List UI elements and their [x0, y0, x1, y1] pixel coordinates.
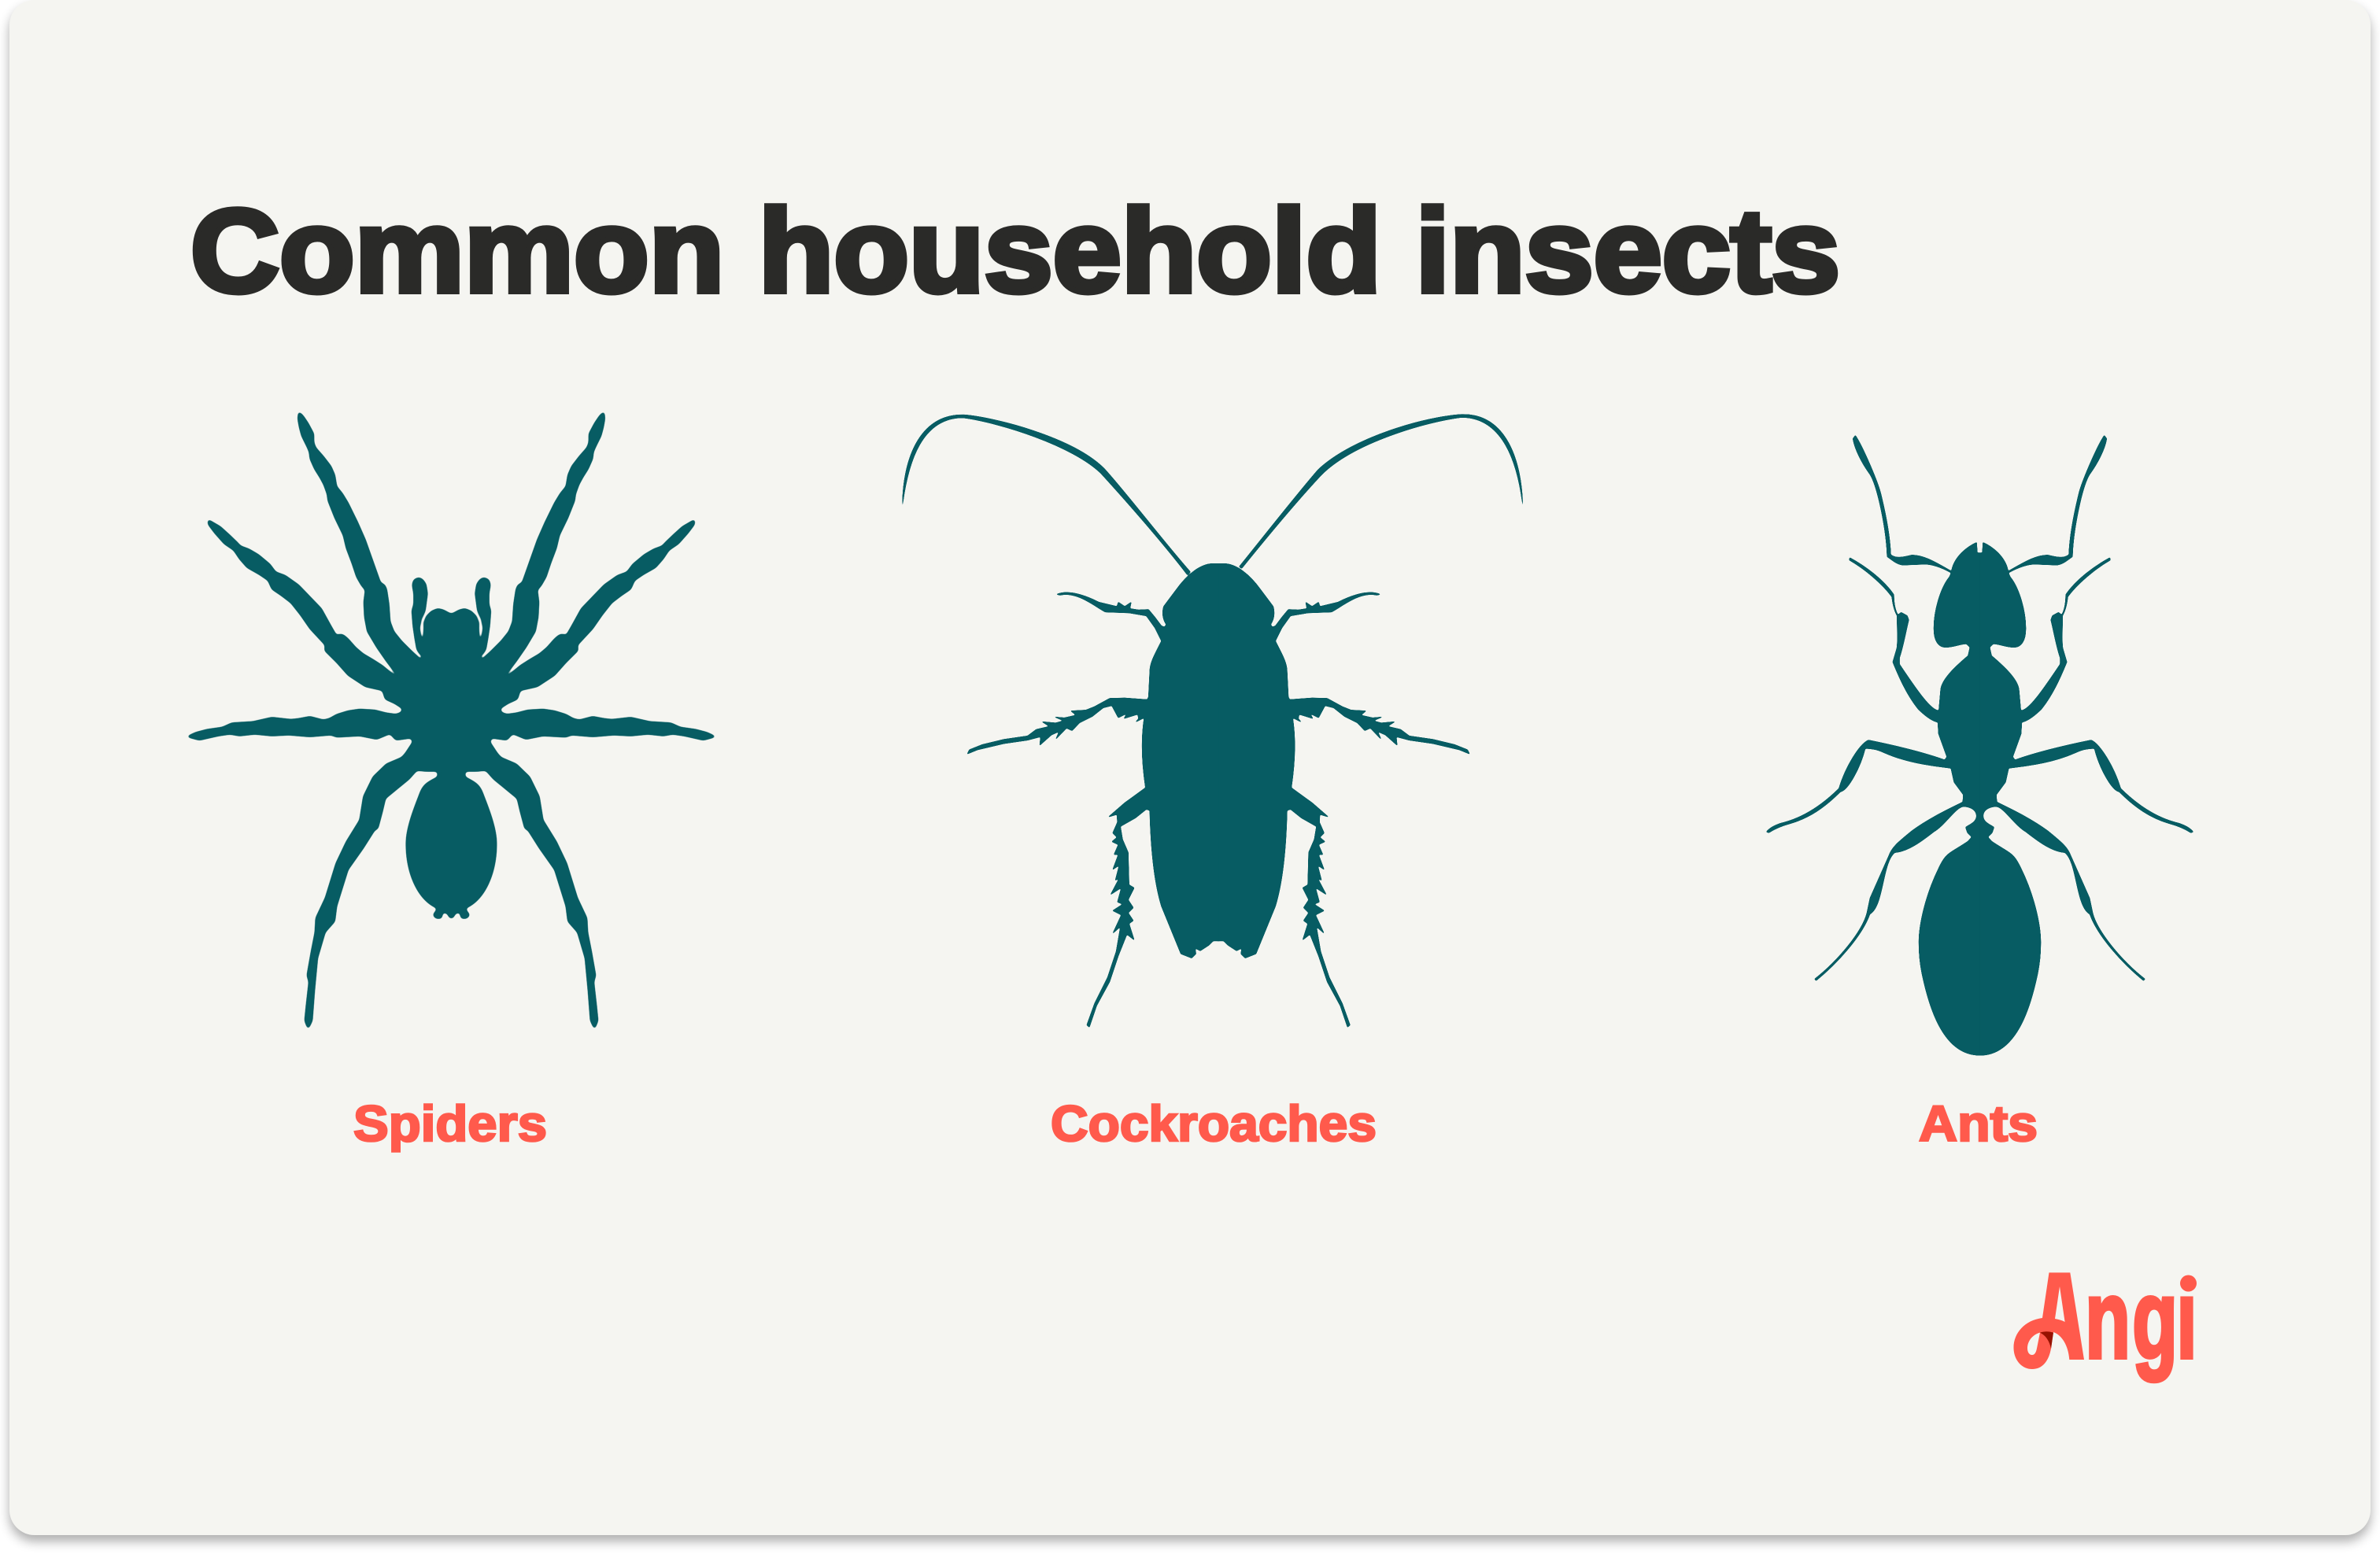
icon: spider silhouette [187, 412, 716, 1029]
title: Common household insects [190, 184, 1840, 316]
label: Cockroaches: Cockroaches [1051, 1095, 1377, 1152]
icon: ant silhouette [1766, 435, 2193, 1055]
label: Ants: Ants [1919, 1095, 2038, 1152]
icon: cockroach silhouette [903, 415, 1523, 1027]
label: Spiders: Spiders [353, 1095, 547, 1152]
cockroach antennae [903, 415, 1523, 575]
logo: Angi: Angi [2029, 1256, 2197, 1382]
